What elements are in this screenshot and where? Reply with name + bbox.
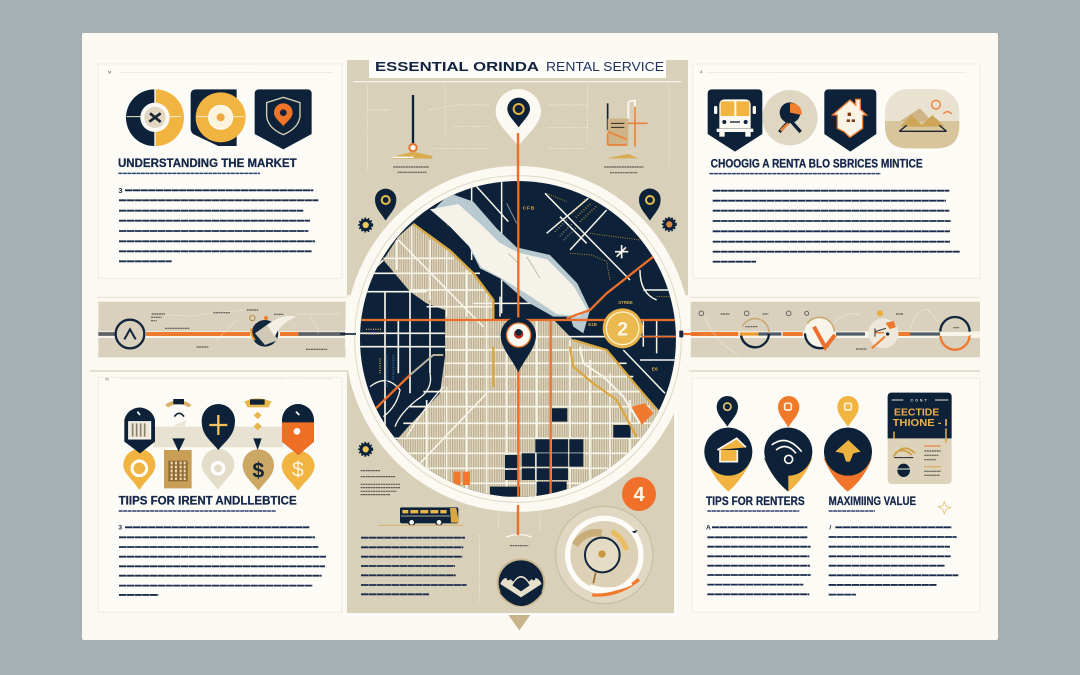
- icon: split dial: [126, 89, 184, 146]
- icon: right map pin: [639, 188, 661, 221]
- icon: lower pin row: [123, 449, 315, 491]
- dark river inlet lines: [370, 373, 443, 437]
- panel: understanding the market: M: [108, 70, 111, 75]
- badge: number 4: 4: [633, 484, 645, 506]
- icon: lower pin row: $: [292, 458, 304, 482]
- route node: scissors marker: [868, 310, 898, 348]
- route node: ring one: [740, 319, 769, 347]
- icon: lower pin row: $: [252, 458, 264, 482]
- card: service phone: THIONE - I: [893, 418, 948, 429]
- route node: end ring: [940, 317, 970, 350]
- map number badge 2: [603, 308, 643, 348]
- upper central street sketch: [353, 82, 682, 173]
- subheading lines: [118, 171, 260, 176]
- title banner: [369, 58, 666, 78]
- icon: bird badge: [498, 559, 544, 606]
- small caption lines: [361, 471, 401, 495]
- panel: tips for rent: M: [105, 376, 109, 381]
- dark left grid: [360, 260, 445, 427]
- icon: ribbon marker: [762, 90, 818, 145]
- small captions: [393, 167, 643, 173]
- badge: number 4: [622, 477, 656, 511]
- body text: left column: A: [706, 525, 711, 532]
- connector: [352, 331, 356, 337]
- body text lines: [118, 525, 326, 595]
- icon: sparkle: [938, 502, 951, 514]
- card: service phone: [888, 393, 952, 484]
- icon: top location pin: [496, 89, 541, 146]
- orange blocks: [453, 403, 653, 485]
- connector: right: [679, 331, 700, 337]
- chart: radial dial: [556, 506, 653, 604]
- panel: choosing a rental: [693, 64, 980, 278]
- strip: right route band: [680, 297, 980, 357]
- body text lines: [118, 186, 318, 261]
- dark upper right grid: [472, 180, 677, 393]
- route node: caret: [116, 320, 144, 348]
- outer ring: [345, 166, 691, 512]
- circular map: E6: [652, 367, 658, 373]
- heading: maximizing value: MAXIMIING VALUE: [829, 495, 916, 508]
- connector: left: [340, 331, 356, 336]
- panel: tips for renters and maximizing value: [690, 371, 980, 612]
- pointer triangle: [508, 615, 530, 630]
- route node: folded marker: [250, 315, 297, 347]
- body text lines: [713, 191, 960, 262]
- gold dot grids: [572, 198, 596, 222]
- lower central details: [361, 506, 653, 630]
- background card: [82, 33, 998, 640]
- icon: upper left gear: [359, 218, 372, 232]
- body text lines: 3: [118, 525, 122, 532]
- subheading lines: [709, 171, 881, 176]
- icon: home pin: [704, 396, 753, 492]
- map labels: CFB: [523, 206, 535, 212]
- icon: shield with pin: [255, 89, 312, 149]
- connector band: [153, 427, 283, 447]
- heading: TIIPS FOR IRENT ANDLLEBTICE: [119, 495, 297, 508]
- infographic canvas: [82, 33, 998, 640]
- card: service phone: EECTIDE: [894, 408, 940, 419]
- vertical orange line above map: [517, 133, 519, 182]
- panel: understanding the market: [98, 64, 342, 278]
- body text: right column: /: [829, 525, 831, 532]
- icon: left map pin: [375, 189, 396, 221]
- icon: arrow pin: [823, 396, 872, 492]
- route labels: [721, 314, 959, 349]
- map number badge 2: 2: [617, 319, 628, 340]
- icon: upper navy pins: [124, 404, 314, 455]
- icon: bus: [378, 507, 463, 525]
- icon: gold disc on shield: [191, 89, 246, 146]
- icon: bus shield: [708, 89, 762, 152]
- route labels: [151, 310, 327, 349]
- body text: right column: [829, 525, 958, 595]
- body text: left column: [706, 525, 811, 594]
- route node: check mark: [804, 317, 835, 348]
- panel: tips for rent: [90, 371, 350, 612]
- body text lines: 3: [118, 186, 122, 195]
- icon: small stacked marks: [165, 398, 272, 452]
- vertical orange line below map: [517, 505, 519, 535]
- icon: right building sketch: [606, 101, 648, 158]
- card: service phone: CONT: [910, 399, 929, 403]
- caption: [510, 544, 528, 547]
- icon: left stem marker: [393, 95, 432, 159]
- icon: lower left gear: [359, 443, 372, 456]
- icon: mountain landscape: [885, 89, 959, 148]
- roads: gold: [413, 224, 657, 437]
- central location pin: [501, 317, 536, 372]
- roads: orange: [360, 160, 677, 497]
- circular map: STREE: [618, 300, 633, 305]
- heading: CHOOGIG A RENTA BLO SBRICES MINTICE: [711, 157, 923, 170]
- river: [430, 193, 590, 333]
- title banner: RENTAL SERVICE: [546, 59, 664, 74]
- subheading lines: [707, 509, 875, 513]
- icon: plane: [615, 245, 628, 258]
- heading: UNDERSTANDING THE MARKET: [118, 157, 297, 170]
- heading: tips for renters: TIPS FOR RENTERS: [706, 495, 805, 508]
- strip: left route band: [97, 297, 356, 357]
- circular map: E1B: [588, 322, 597, 327]
- panel: central beige column: [345, 60, 690, 615]
- icon: wifi pin: [764, 396, 813, 492]
- city blocks: [383, 223, 659, 497]
- title banner: ESSENTIAL ORINDA: [375, 59, 540, 74]
- body text lines: [361, 538, 467, 594]
- dark blocks: [490, 408, 631, 497]
- base of map line: [506, 534, 532, 537]
- icon: house shield: [824, 89, 876, 152]
- icon: upper right gear: [663, 218, 676, 231]
- panel: choosing a rental: 4: [700, 70, 703, 75]
- subheading lines: [119, 509, 276, 513]
- circular map: [337, 160, 700, 512]
